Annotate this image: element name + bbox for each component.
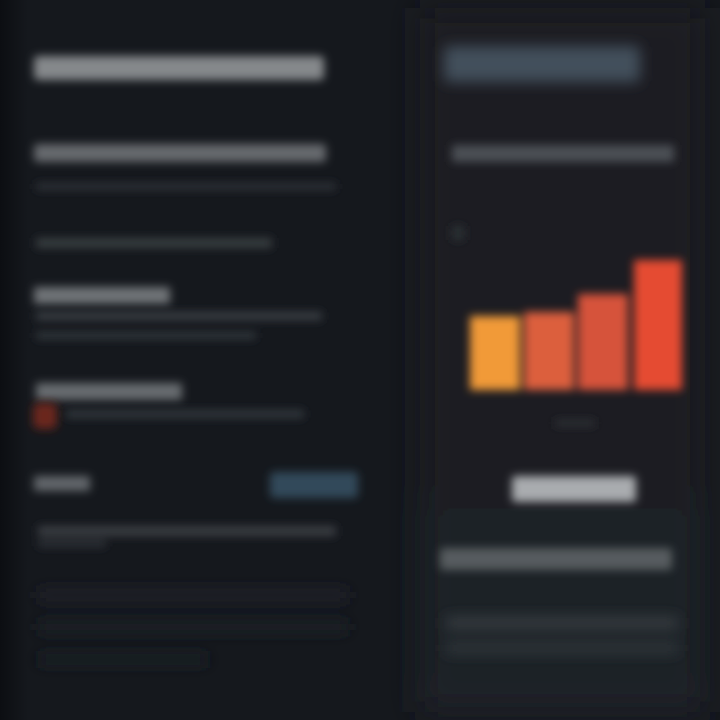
value caption: [440, 548, 672, 570]
right heading: [452, 145, 674, 162]
text block: two: [66, 410, 304, 418]
panel: right column: [420, 8, 705, 712]
text block: footer: [38, 590, 348, 664]
axis label: [555, 420, 595, 426]
subheading one: [34, 287, 170, 304]
badge heading: [444, 46, 640, 82]
panel: left column content: [33, 56, 358, 664]
text block: three: [38, 526, 336, 547]
heading: [34, 56, 324, 80]
label: [34, 476, 90, 491]
icon: red marker: [33, 403, 57, 429]
bar chart: [470, 260, 682, 390]
section title: [34, 144, 326, 162]
text block: right footer: [446, 617, 678, 653]
badge: [270, 472, 358, 498]
panel: right column content: [440, 46, 682, 653]
axis tick: [452, 226, 464, 240]
subheading two: [36, 383, 182, 400]
big value: [512, 476, 636, 502]
text block: intro: [36, 183, 336, 248]
text block: one: [36, 312, 322, 339]
